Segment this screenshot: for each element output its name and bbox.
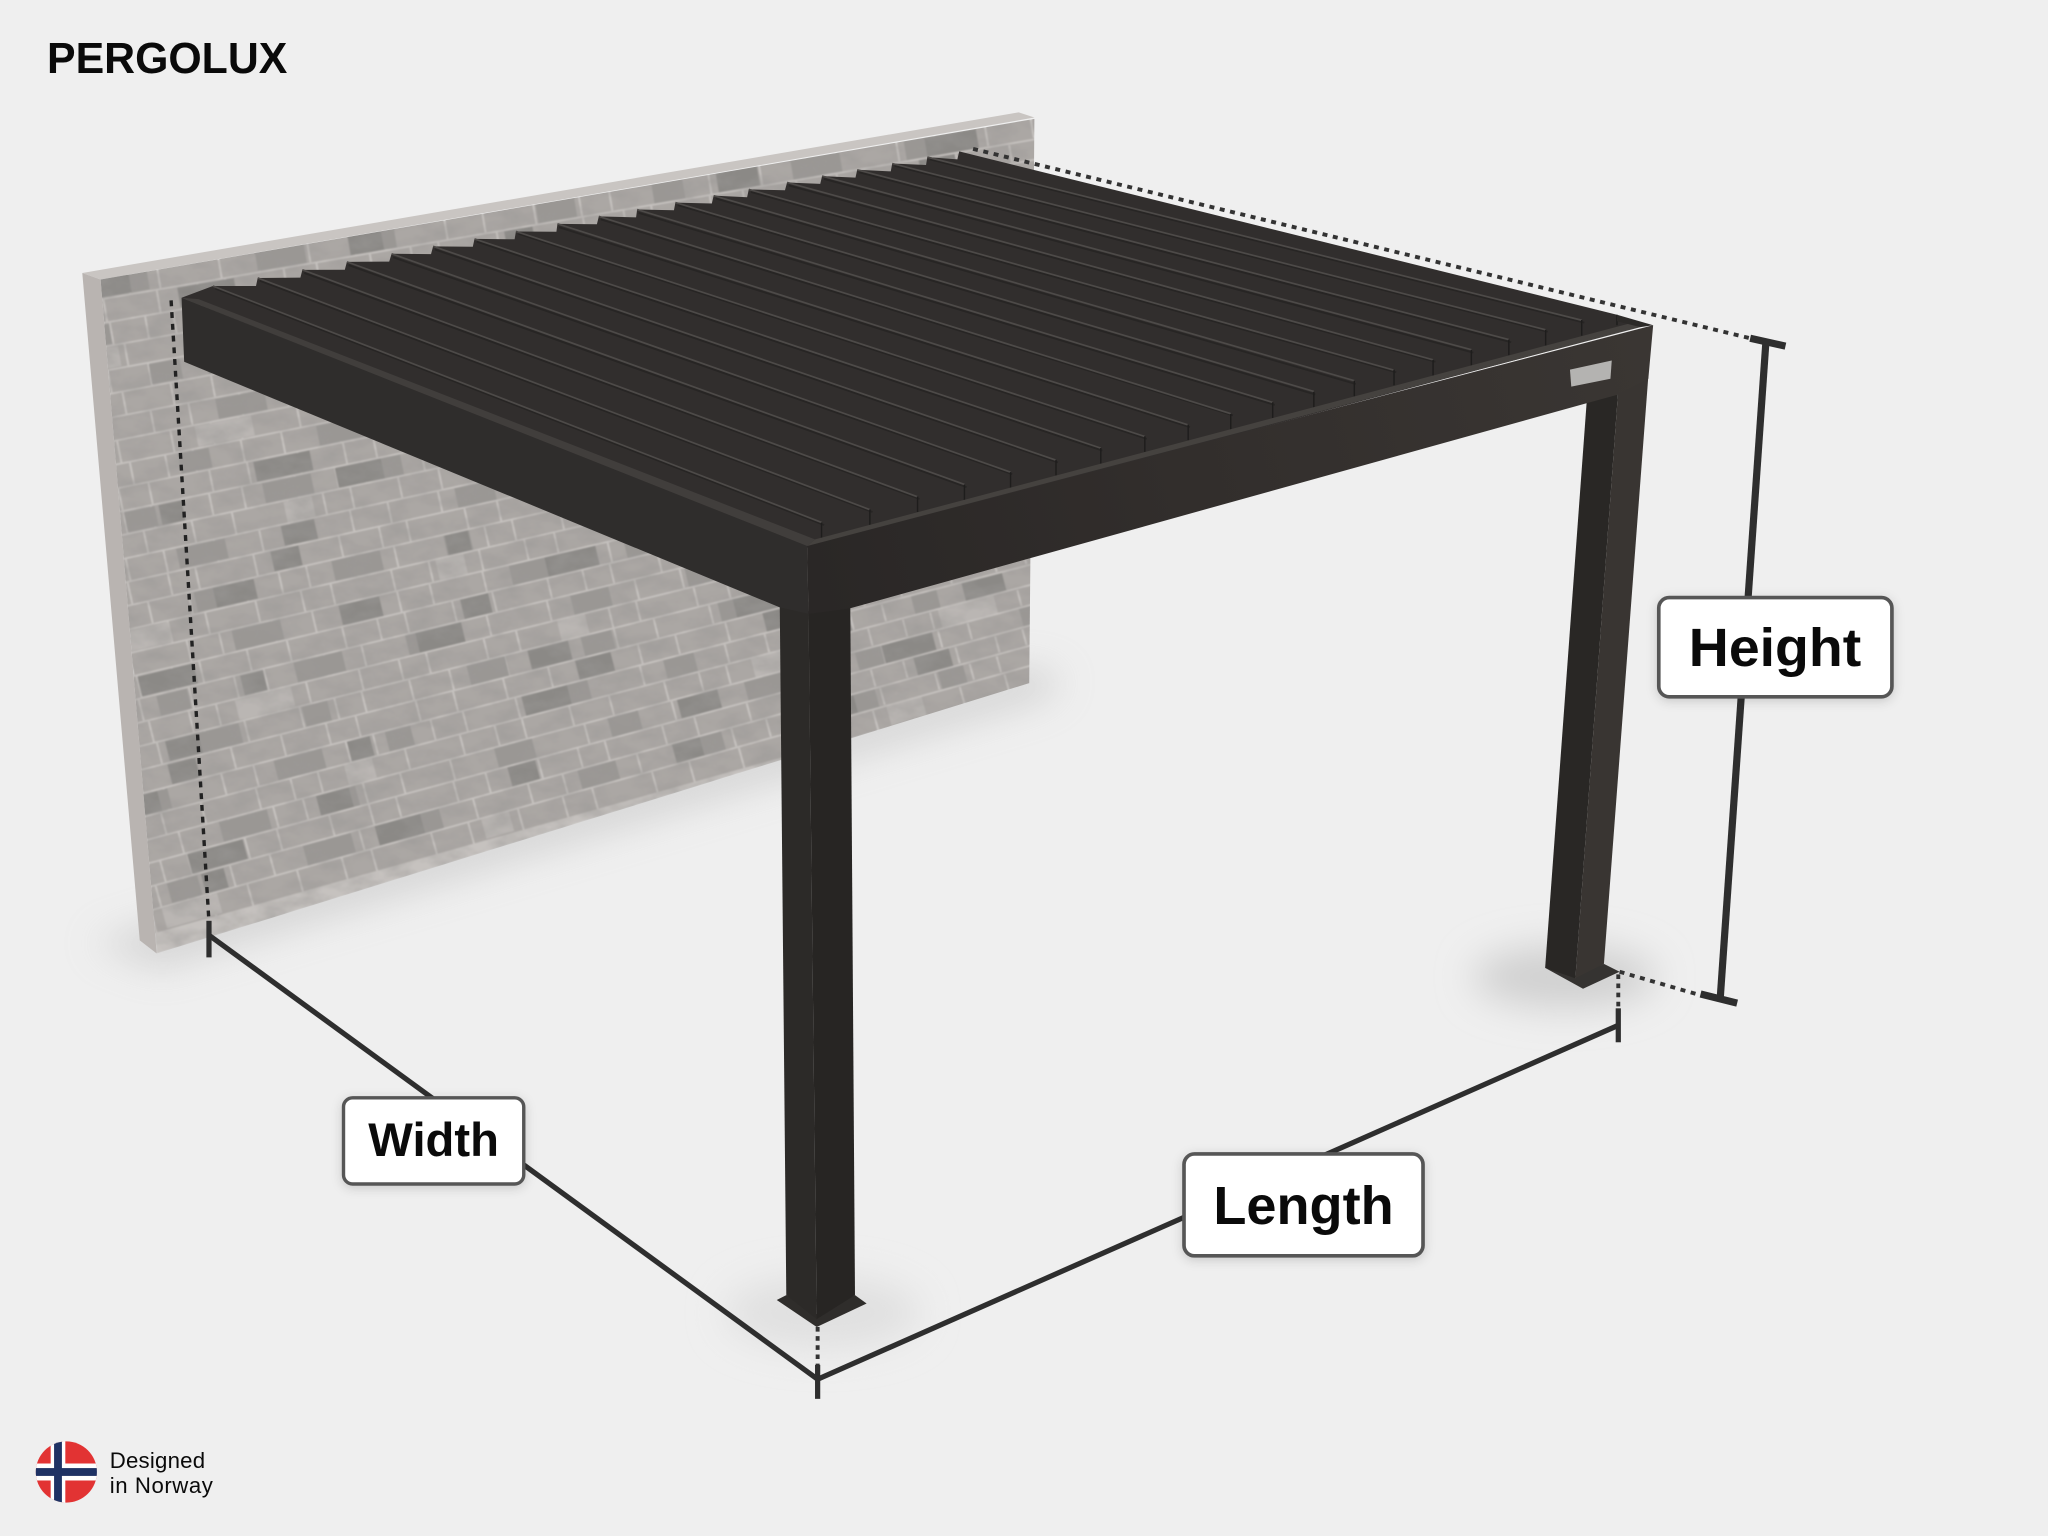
wall brick face xyxy=(78,104,1045,967)
icon: norway flag xyxy=(36,1441,97,1503)
height label xyxy=(1659,598,1892,697)
right beam xyxy=(807,325,1653,614)
roof slat surface xyxy=(182,151,1640,549)
left rim xyxy=(182,298,815,546)
width label xyxy=(344,1098,524,1184)
dotted guide: roof top to height xyxy=(973,149,1750,338)
roof slat highlights xyxy=(213,157,1582,522)
width label: Width xyxy=(368,1113,499,1166)
length label: Length xyxy=(1213,1177,1394,1236)
text: designed in norway: in Norway xyxy=(110,1473,214,1498)
length dimension line xyxy=(818,1008,1618,1399)
height label: Height xyxy=(1689,619,1861,678)
floor shadows xyxy=(91,666,1656,1349)
pergola xyxy=(182,151,1653,1327)
dotted guide: rear post base to height xyxy=(1620,972,1701,995)
left beam xyxy=(182,298,808,614)
beam end cap xyxy=(1617,315,1653,327)
rear post xyxy=(1545,376,1648,989)
brick wall xyxy=(78,104,1045,967)
right rim xyxy=(807,323,1640,546)
text: designed in norway: Designed xyxy=(110,1448,205,1473)
dotted guide: rear post base to length xyxy=(1617,974,1620,1008)
wall side edge xyxy=(82,273,157,953)
wall top cap xyxy=(82,112,1034,280)
dotted guide: wall top to width start xyxy=(171,300,209,922)
dotted guide: front post base xyxy=(816,1327,819,1366)
front post xyxy=(777,605,867,1327)
width dimension line xyxy=(209,921,818,1379)
brand plate xyxy=(1570,360,1612,387)
norway badge xyxy=(34,1439,214,1505)
roof slat grooves xyxy=(216,159,1584,525)
title: brand logo: PERGOLUX xyxy=(47,35,288,83)
length label xyxy=(1184,1154,1423,1256)
slat end ticks xyxy=(822,315,1617,538)
height dimension line xyxy=(1701,338,1785,1003)
